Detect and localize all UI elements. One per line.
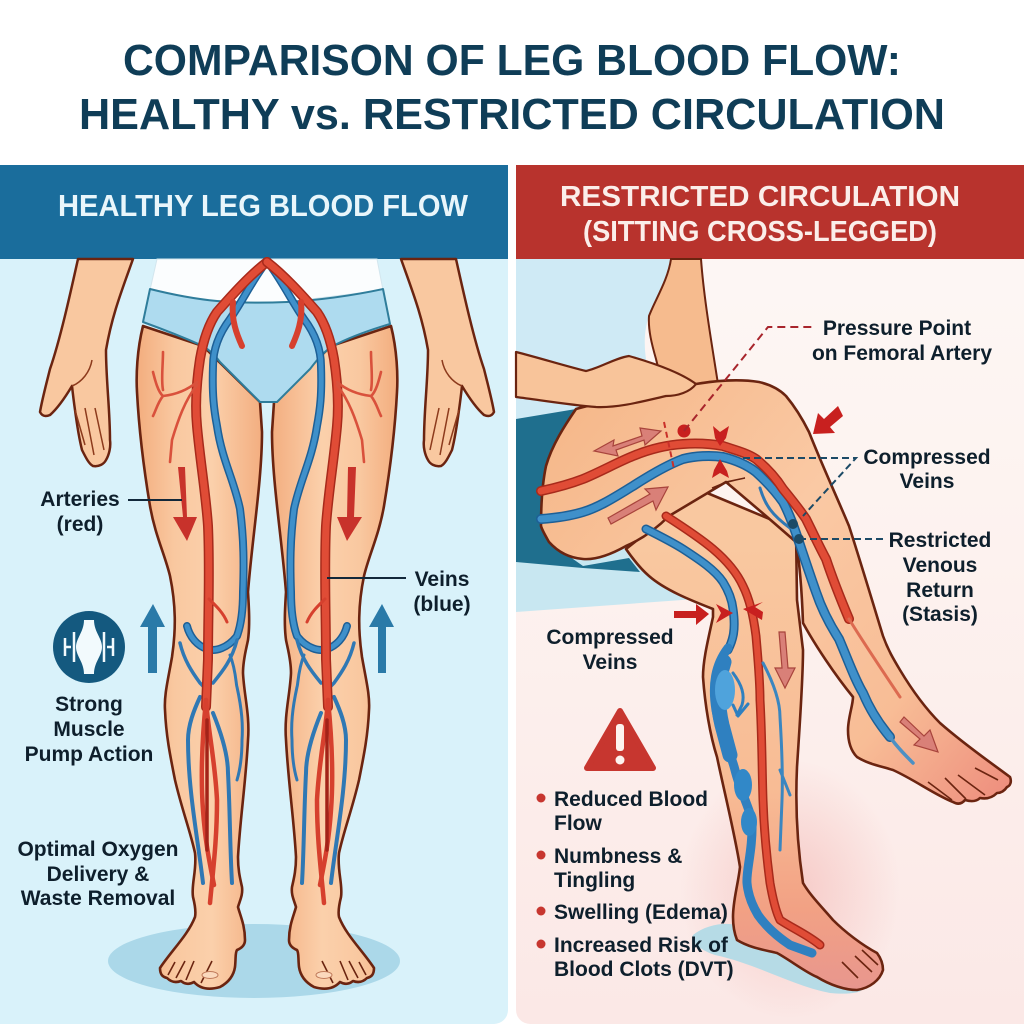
right leg [272, 326, 397, 989]
label: pressure point [812, 317, 992, 365]
label: compressed veins lower: Compressed [546, 626, 674, 649]
label: oxygen delivery: Waste Removal [21, 887, 175, 910]
arrow: muscle pump right [369, 604, 394, 673]
foot floor shadow [692, 924, 863, 994]
arrow: muscle pump left [140, 604, 165, 673]
toes: upper foot [928, 768, 998, 800]
title [79, 36, 945, 139]
upper arm [649, 259, 718, 395]
symptom list [536, 788, 734, 981]
label: arteries: (red) [57, 513, 103, 536]
figure: seated crossed legs [516, 259, 1011, 990]
symptom list: Reduced Blood [554, 788, 708, 811]
callout lines [664, 327, 883, 539]
symptom list: Numbness & [554, 845, 682, 868]
title: COMPARISON OF LEG BLOOD FLOW: [123, 36, 901, 85]
header: healthy: HEALTHY LEG BLOOD FLOW [58, 188, 469, 223]
header: restricted: (SITTING CROSS-LEGGED) [583, 216, 937, 248]
floor shadow [108, 924, 400, 998]
forearm and hand [516, 352, 696, 407]
upper leg crossing [541, 380, 1011, 804]
label: compressed veins upper [863, 446, 991, 493]
label: restricted venous return: (Stasis) [902, 603, 978, 626]
label: pressure point: Pressure Point [823, 317, 971, 340]
veins: blue [180, 268, 354, 883]
arrow: artery flow right [337, 467, 362, 541]
arm and hand: left [40, 259, 133, 466]
panel: restricted circulation [516, 165, 1024, 1024]
pressure markers [674, 406, 843, 625]
label: muscle pump: Muscle [53, 718, 125, 741]
header: restricted [516, 165, 1024, 259]
label: muscle pump: Pump Action [25, 743, 153, 766]
symptom list: Tingling [554, 869, 635, 892]
panel: healthy leg blood flow [0, 165, 508, 1024]
label: restricted venous return: Return [906, 579, 974, 602]
label: restricted venous return: Venous [903, 554, 977, 577]
label: compressed veins upper: Compressed [863, 446, 991, 469]
lower leg [626, 490, 883, 990]
label: muscle pump: Strong [55, 693, 123, 716]
icon: muscle pump [53, 611, 125, 683]
arrows: flow direction [594, 428, 938, 752]
arteries: red [153, 262, 381, 903]
label: compressed veins lower [546, 626, 674, 674]
header: healthy [0, 165, 508, 259]
label: arteries [40, 488, 182, 536]
shirt [150, 259, 383, 302]
icon: warning triangle [587, 711, 653, 768]
varicose bulges [715, 670, 757, 836]
underwear [143, 289, 390, 402]
label: oxygen delivery: Delivery & [47, 863, 149, 886]
label: arteries: Arteries [40, 488, 120, 511]
shorts [516, 409, 640, 572]
label: pressure point: on Femoral Artery [812, 342, 992, 365]
symptom list: Increased Risk of [554, 934, 729, 957]
title: HEALTHY vs. RESTRICTED CIRCULATION [79, 90, 945, 139]
label: veins: Veins [415, 568, 469, 591]
label: veins [327, 568, 471, 616]
callout dot: restricted return [794, 534, 804, 544]
vessels: lower leg [646, 516, 820, 953]
label: veins: (blue) [413, 593, 471, 616]
callout dot: compressed veins [788, 519, 798, 529]
label: oxygen delivery [17, 838, 179, 910]
label: muscle pump [25, 693, 153, 766]
symptom list: Swelling (Edema) [554, 901, 728, 924]
label: restricted venous return [889, 529, 991, 626]
crease at knee [712, 478, 745, 488]
figure: standing legs [40, 259, 494, 989]
foot swelling glow [680, 760, 900, 1020]
seat tint [516, 400, 710, 612]
header: restricted: RESTRICTED CIRCULATION [560, 181, 960, 213]
label: oxygen delivery: Optimal Oxygen [17, 838, 179, 861]
label: compressed veins upper: Veins [900, 470, 954, 493]
label: restricted venous return: Restricted [889, 529, 991, 552]
shirt [516, 259, 671, 420]
symptom list: Blood Clots (DVT) [554, 958, 734, 981]
symptom list: Flow [554, 812, 602, 835]
arm and hand: right [401, 259, 494, 466]
toes: lower foot [842, 950, 878, 978]
vessels: upper leg [541, 444, 913, 763]
left leg [137, 326, 262, 989]
label: compressed veins lower: Veins [583, 651, 637, 674]
arrow: artery flow left [173, 467, 197, 541]
